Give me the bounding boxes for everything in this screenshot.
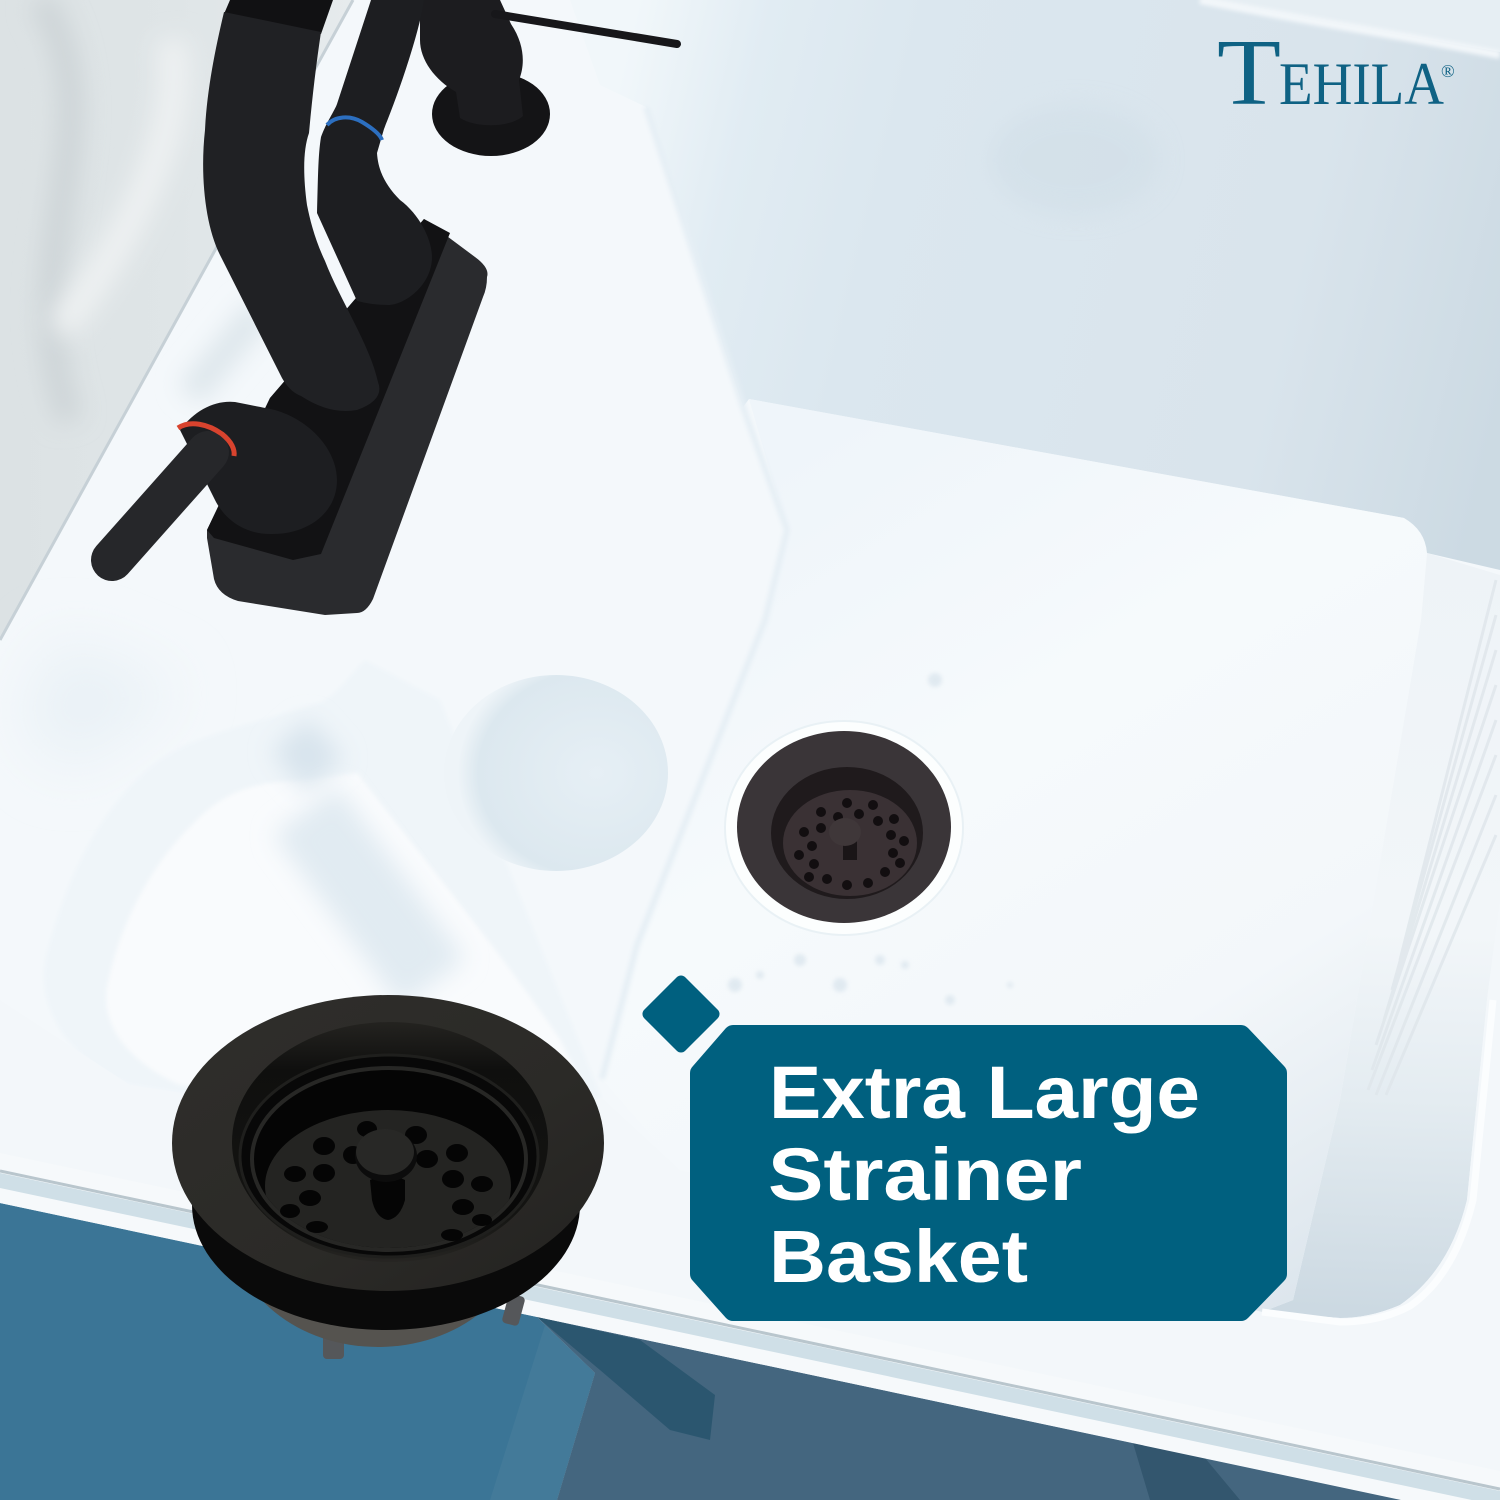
ridge shadow on divider <box>602 107 787 1079</box>
drain basket plate <box>783 790 917 896</box>
faucet <box>112 0 488 615</box>
main basin back wall <box>570 0 1500 570</box>
knob stem <box>370 1176 405 1220</box>
callout panel <box>690 1025 1287 1321</box>
featured strainer product <box>172 995 604 1359</box>
main spout <box>203 12 379 411</box>
base plate top surface <box>207 219 450 560</box>
floor and cabinet area <box>0 1203 1417 1500</box>
small basin <box>44 660 602 1135</box>
drain inner recess <box>771 767 923 899</box>
handle lever <box>112 452 208 560</box>
small basin floor <box>106 773 585 1130</box>
wall stain patch <box>990 105 1160 215</box>
small basin outer slope <box>44 660 602 1135</box>
callout text <box>768 1051 1200 1298</box>
small basin blue reflections <box>290 735 325 775</box>
dispenser pump rod <box>495 14 677 44</box>
drain knob stem <box>843 838 857 860</box>
callout line 3: Basket <box>769 1215 1028 1298</box>
main basin floor <box>602 399 1427 1312</box>
front hub <box>180 402 337 534</box>
faucet base plate <box>207 219 488 615</box>
logo letters EHILA: EHILA <box>1279 51 1444 117</box>
callout diamond <box>640 973 722 1055</box>
floor: teal left section <box>0 1203 595 1500</box>
basin right washboard wall <box>1262 553 1500 1318</box>
knob <box>355 1130 417 1182</box>
top rim highlight <box>1200 0 1500 55</box>
water droplets <box>728 673 1013 1005</box>
right leg shadow <box>1133 1443 1240 1500</box>
spout collar <box>224 0 333 34</box>
cabinet leg shadow <box>537 1317 715 1440</box>
overflow recess circle <box>444 675 668 871</box>
callout line 1: Extra Large <box>769 1051 1200 1134</box>
deck area below basin lip <box>0 900 1500 1500</box>
strainer lower gasket <box>192 1080 580 1330</box>
sink drain installed <box>725 721 963 935</box>
callout: Extra Large Strainer Basket <box>640 973 1287 1321</box>
drain flange <box>737 731 951 923</box>
callout line 2: Strainer <box>768 1133 1082 1216</box>
basket plate <box>265 1110 511 1262</box>
floor: lighter strip <box>490 1325 595 1500</box>
background wall behind sink <box>0 0 353 640</box>
deck pale slope left of small basin <box>20 640 180 770</box>
blue ring <box>327 117 382 140</box>
basket ring outer <box>240 1055 538 1257</box>
strainer pegs <box>323 1293 526 1359</box>
red ring <box>178 424 234 456</box>
flange inner slope <box>232 1022 548 1262</box>
sink deck back edge <box>0 0 353 640</box>
deck shadow band by wall <box>190 310 260 395</box>
rear neck and hub <box>317 0 432 305</box>
drain knob <box>829 818 861 846</box>
drain holes <box>794 798 909 890</box>
dispenser body <box>420 0 523 125</box>
basket ring inner <box>252 1068 526 1250</box>
drain white halo <box>725 721 963 935</box>
knob top <box>356 1129 414 1175</box>
dispenser base <box>432 72 550 156</box>
sink front rim <box>0 1153 1500 1500</box>
basket holes <box>280 1121 493 1241</box>
logo registered mark: ® <box>1441 61 1455 81</box>
basin lip curve <box>1262 1000 1493 1322</box>
strainer lower body <box>232 1109 524 1347</box>
strainer flange <box>172 995 604 1291</box>
soap dispenser <box>420 0 677 156</box>
floor: slate wood section <box>537 1317 1417 1500</box>
logo letter T: T <box>1217 21 1281 125</box>
logo: Tehila <box>1217 21 1455 125</box>
